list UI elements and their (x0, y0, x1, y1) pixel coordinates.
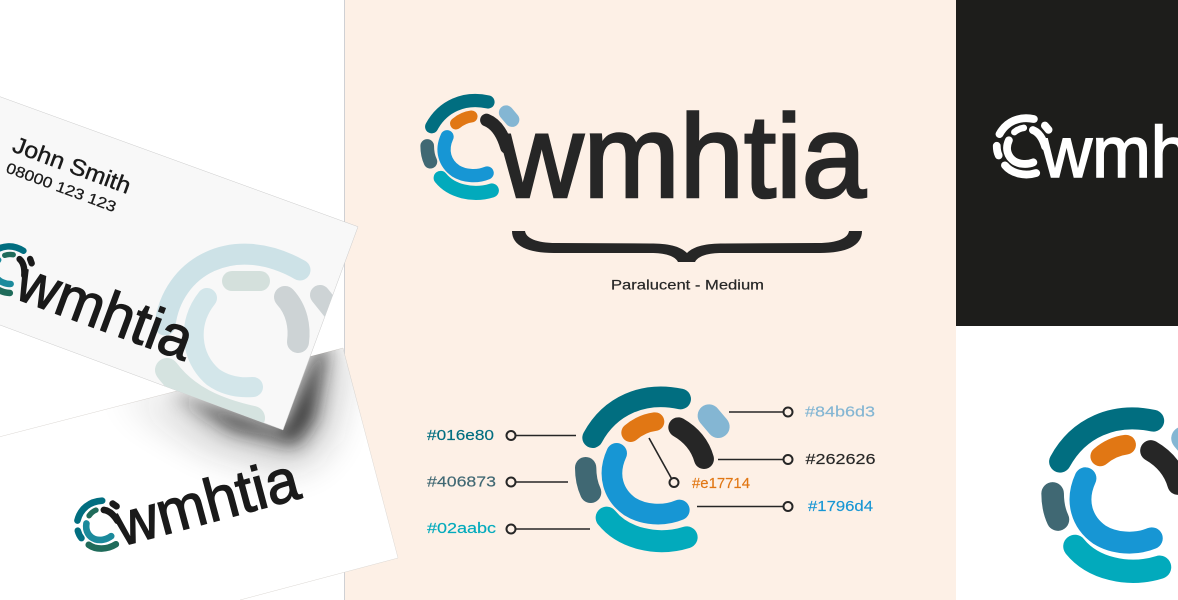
icon: colour logo mark, bottom right (1053, 418, 1178, 571)
panel: back business card (0, 345, 398, 600)
swatch label: #84b6d3: #84b6d3 (805, 404, 875, 420)
logo: back card: wmhtia (106, 444, 306, 559)
panel: front business card (0, 97, 358, 430)
icon: large logo mark (586, 397, 718, 541)
watermark logo mark (165, 254, 332, 418)
curly brace (512, 231, 862, 262)
swatch label: #406873: #406873 (427, 474, 496, 490)
swatch label: #02aabc: #02aabc (427, 521, 496, 537)
name: John Smith (9, 131, 135, 199)
swatch label: #016e80 (427, 428, 576, 444)
panel: dark logo tile (956, 0, 1178, 326)
swatch label: #016e80: #016e80 (427, 428, 494, 444)
swatch label: #1796d4: #1796d4 (808, 499, 873, 515)
font name caption: Paralucent - Medium (611, 276, 764, 292)
swatch label: #262626 (718, 452, 876, 468)
phone number: 08000 123 123 (4, 160, 118, 216)
colour palette diagram (427, 397, 876, 541)
swatch label: #406873 (427, 474, 568, 490)
swatch label: #84b6d3 (729, 404, 875, 420)
panel: beige brand guide (344, 0, 956, 600)
card drop shadow (120, 345, 345, 465)
swatch label: #1796d4 (697, 499, 873, 515)
swatch label: #e17714 (649, 438, 750, 492)
swatch label: #e17714: #e17714 (692, 476, 750, 492)
swatch label: #262626: #262626 (806, 452, 876, 468)
swatch label: #02aabc (427, 521, 590, 537)
main logo: wmhtia (499, 91, 866, 223)
logo: front card, clipped at left: wmhtia (7, 247, 203, 373)
